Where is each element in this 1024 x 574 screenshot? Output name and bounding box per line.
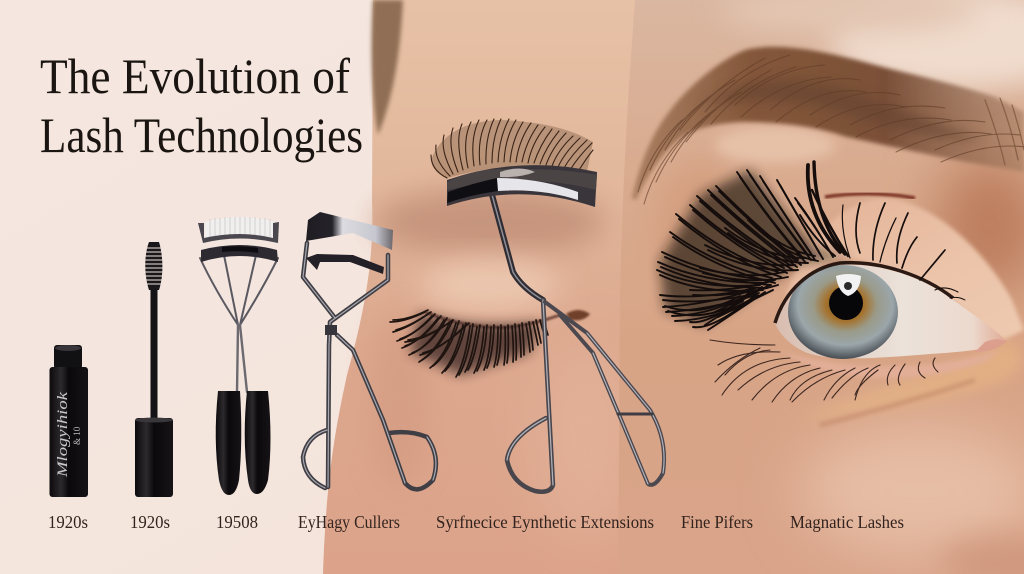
closed-eye lashes bbox=[390, 310, 548, 377]
pupil bbox=[829, 286, 863, 320]
catchlight bbox=[836, 274, 861, 296]
iris bbox=[788, 265, 898, 359]
panel: closed-eye face bbox=[323, 0, 660, 574]
icon: mascara tube: & 10 bbox=[72, 426, 82, 445]
timeline labels: Syrfnecice Eynthetic Extensions bbox=[436, 512, 654, 532]
timeline labels: Fine Pifers bbox=[681, 512, 753, 532]
curler clamp bbox=[447, 165, 597, 207]
lower lid glow bbox=[800, 340, 1021, 420]
icon: eyelash curler small bbox=[303, 212, 436, 489]
icon: lash separator bbox=[198, 217, 279, 495]
curler arms bbox=[488, 180, 664, 492]
title: Lash Technologies bbox=[40, 107, 363, 163]
icon: eyelash curler large with strip lash bbox=[431, 119, 664, 492]
icon: mascara tube: Mlogyihiok bbox=[55, 392, 71, 478]
lower lashes bbox=[710, 340, 938, 402]
closed eyelid crease bbox=[425, 312, 560, 327]
timeline labels: 19508 bbox=[216, 512, 258, 532]
timeline labels: EyHagy Cullers bbox=[298, 512, 400, 532]
eyebrow bbox=[632, 47, 1024, 204]
title: The Evolution of bbox=[40, 48, 350, 104]
title bbox=[40, 48, 363, 163]
panel: open-eye face bbox=[618, 0, 1024, 574]
strip lash bbox=[431, 119, 593, 178]
timeline labels: Magnatic Lashes bbox=[790, 512, 904, 532]
open eye bbox=[775, 263, 1007, 359]
timeline labels: 1920s bbox=[48, 512, 88, 532]
timeline labels bbox=[48, 512, 904, 532]
icon: mascara tube bbox=[50, 345, 88, 497]
icon: mascara wand bbox=[135, 242, 173, 497]
timeline labels: 1920s bbox=[130, 512, 170, 532]
upper eyelid bbox=[780, 198, 1024, 342]
upper lashes bbox=[657, 162, 965, 330]
